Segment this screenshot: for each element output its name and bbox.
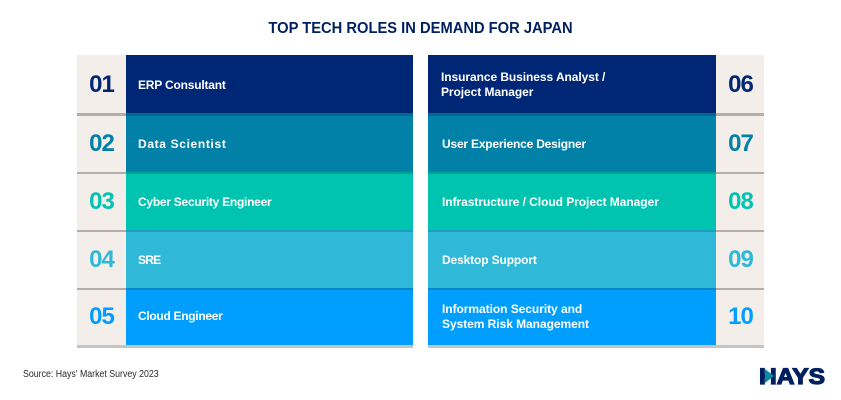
row 08 <box>428 174 764 232</box>
row 10: 10 <box>728 303 753 330</box>
row 05: 05 <box>89 303 114 330</box>
row 01 <box>77 55 413 116</box>
logo: Hays <box>759 366 825 386</box>
row 06: 06 <box>728 71 753 98</box>
row 03: Cyber Security Engineer <box>138 195 271 209</box>
row 02 <box>77 116 413 174</box>
row 09: Desktop Support <box>442 253 537 267</box>
row 05: Cloud Engineer <box>138 309 222 323</box>
row 06: Project Manager <box>441 85 533 99</box>
row 08: 08 <box>728 188 753 215</box>
row 02: Data Scientist <box>138 137 226 151</box>
row 04: 04 <box>89 246 114 273</box>
panel: right roles table <box>428 55 764 348</box>
row 06 <box>428 55 764 116</box>
row 10: Information Security and <box>442 302 582 316</box>
row 07: User Experience Designer <box>442 137 586 151</box>
row 07 <box>428 116 764 174</box>
row 06: Insurance Business Analyst / <box>441 70 605 84</box>
row 04: SRE <box>138 253 160 267</box>
row 04 <box>77 232 413 290</box>
row 07: 07 <box>728 130 753 157</box>
source note: Source: Hays' Market Survey 2023 <box>23 369 159 380</box>
row 05 <box>77 290 413 348</box>
row 10: System Risk Management <box>442 317 589 331</box>
row 01: ERP Consultant <box>138 78 226 92</box>
row 03 <box>77 174 413 232</box>
row 03: 03 <box>89 188 114 215</box>
row 09 <box>428 232 764 290</box>
row 01: 01 <box>89 71 114 98</box>
row 02: 02 <box>89 130 114 157</box>
title: TOP TECH ROLES IN DEMAND FOR JAPAN <box>268 20 573 37</box>
logo arrow <box>765 369 774 383</box>
panel: left roles table <box>77 55 413 348</box>
row 09: 09 <box>728 246 753 273</box>
row 08: Infrastructure / Cloud Project Manager <box>442 195 659 209</box>
row 10 <box>428 290 764 348</box>
